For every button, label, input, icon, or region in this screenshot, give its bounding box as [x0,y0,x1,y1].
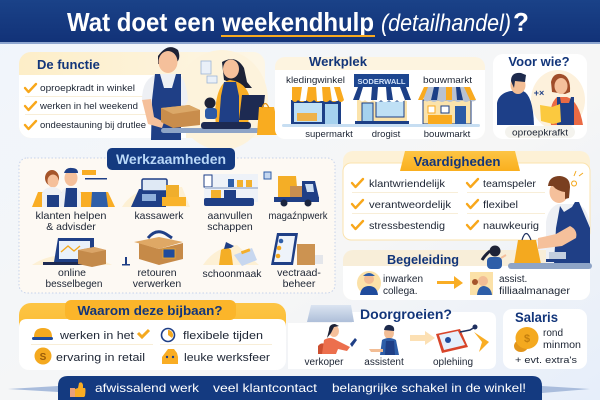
item: leuke werksfeer: leuke werksfeer [184,352,270,364]
list: vaardigheden [352,178,545,232]
man [158,47,179,64]
footer text [95,381,526,395]
icon: munten: $ [524,333,530,345]
label: rond minimum: rond [543,328,563,339]
item: voorraadbeheer [271,233,323,265]
heading pill: werkzaamheden: Werkzaamheden [116,151,226,167]
list: functie items [25,83,170,131]
heading: salaris: Salaris [515,310,558,325]
list: vaardigheden: stressbestendig [369,220,445,232]
panel: werkplek [275,54,485,140]
panel: salaris [503,309,587,369]
label: voorraadbeheer [277,267,321,290]
list: functie items: ondeestauning bij drutlee [40,120,146,131]
footer text: belangrijke schakel in de winkel! [332,381,526,395]
heading: de functie: De functie [37,57,100,72]
icon: assistent filiaalmanager [470,272,493,295]
box [161,105,200,128]
label: collega: inwarken [383,274,423,285]
label: assistent filiaalmanager: filliaalmanager [499,286,571,297]
panel: begeleiding [343,250,590,300]
label: retouren verwerken: verwerken [133,278,181,290]
item: retouren [122,232,183,266]
store: supermarkt [291,87,344,124]
label: verkoper: verkoper [305,357,344,368]
illustration: verkoper [318,324,357,354]
item: aanvullen schappen [204,172,271,206]
panel: de functie [19,52,265,138]
label: klanten helpen: klanten helpen [36,210,107,222]
item: kassawerk [122,179,190,207]
woman [222,59,252,88]
label: assistent: assistent [364,357,404,368]
illustration: assistent [369,325,399,355]
label: online bestellingen: online [58,267,86,279]
footer text: afwissalend werk [95,381,200,395]
item: online bestellingen [32,238,112,267]
arrow [437,276,463,289]
label: voorraadbeheer: vectraad- [277,267,321,279]
item: ervaring in retail: S [40,352,47,363]
label: retouren verwerken [133,267,181,290]
header banner [0,0,600,44]
store: drogist [353,87,411,124]
list: functie items: oproepkradt in winkel [40,83,135,94]
icon: duim omhoog [70,382,86,397]
footer banner [8,376,590,400]
illustration: verkoper aan kassa [482,171,592,269]
label: online bestellingen [46,267,103,290]
item: schoonmaak [203,242,259,266]
heading: begeleiding: Begeleiding [387,252,459,267]
label: magazijnwerk: magaźnpwerk [268,210,328,222]
label: rond minimum: minmon [543,340,581,351]
arrow [474,332,489,352]
label: collega [383,274,423,297]
panel: waarom deze bijbaan [19,300,286,370]
item: flexibele tijden: flexibele tijden [183,330,263,342]
label: bouwmarkt boven: bouwmarkt [423,75,472,86]
panel: werkzaamheden [19,148,335,293]
label: voorraadbeheer: beheer [283,278,316,290]
item: ervaring in retail [34,348,145,364]
label: collega: collega. [383,286,417,297]
heading pill: vaardigheden [400,151,520,171]
illustration: twee personen: +× [534,88,544,98]
monitor [239,95,265,120]
label: aanvullen schappen: aanvullen [208,210,253,222]
list: vaardigheden: verantweordelijk [369,199,452,211]
label: rond minimum [543,328,581,351]
store sign [354,74,409,87]
arrow [410,331,435,345]
item: flexibele tijden [162,328,263,342]
label: retouren verwerken: retouren [137,267,177,279]
label: supermarkt: supermarkt [305,129,353,140]
item: ervaring in retail: ervaring in retail [56,352,145,364]
counter [161,128,286,133]
heading: voor wie: Voor wie? [508,54,570,69]
item: klanten helpen [32,168,115,207]
heading pill: waarom: Waarom deze bijbaan? [78,303,223,318]
title: Wat doet een weekendhulp [67,7,374,37]
title: ? [513,7,529,37]
list: vaardigheden: klantwriendelijk [369,178,446,190]
panel: doorgroeien [288,305,496,369]
heading pill: waarom [65,300,236,320]
child [490,246,500,256]
label: assistent filiaalmanager: assist. [499,274,527,285]
list: vaardigheden: nauwkeurig [483,220,539,232]
label: schoonmaak: schoonmaak [202,268,262,280]
label: bouwmarkt: bouwmarkt [424,129,471,140]
child [204,98,216,108]
item: werken in het weekend [32,328,149,342]
title: (detailhandel) [381,10,511,37]
label: aanvullen schappen: schappen [207,221,253,233]
item: werken in het weekend: werken in het [59,330,134,342]
label: kledingwinkel: kledingwinkel [286,75,345,86]
heading: doorgroeien: Doorgroeien? [360,306,452,322]
label: assistent filiaalmanager [499,274,571,297]
item: magazijnwerk [274,176,319,206]
label: kassawerk: kassawerk [134,210,184,222]
list: vaardigheden: teamspeler [483,178,537,190]
heading pill: werkzaamheden [107,148,235,170]
panel: vaardigheden [343,151,590,240]
store sign: SODERWALL [358,77,406,86]
label: online bestellingen: besselbegen [46,278,103,290]
label: aanvullen schappen [207,210,253,233]
store: bouwmarkt [418,87,476,124]
label: extra's: + evt. extra's [515,355,577,366]
label: drogist: drogist [372,129,401,140]
label: opleiding: oplehiing [433,357,473,368]
list: vaardigheden: flexibel [483,199,518,211]
panel: voor wie [493,54,587,139]
heading pill: vaardigheden: Vaardigheden [414,154,501,169]
icon: collega [357,271,381,295]
list: functie items: werken in hel weekend [39,101,138,112]
footer text: veel klantcontact [213,381,318,395]
bag [257,107,280,135]
illustration: winkelmedewerkers met doos [142,47,286,150]
label: adviseren: & advisder [46,221,96,233]
label pill: oproepkracht: oproepkrafkt [512,128,568,138]
heading: werkplek: Werkplek [309,54,368,69]
icon: diploma [436,324,478,353]
item: leuke werksfeer [162,349,270,364]
